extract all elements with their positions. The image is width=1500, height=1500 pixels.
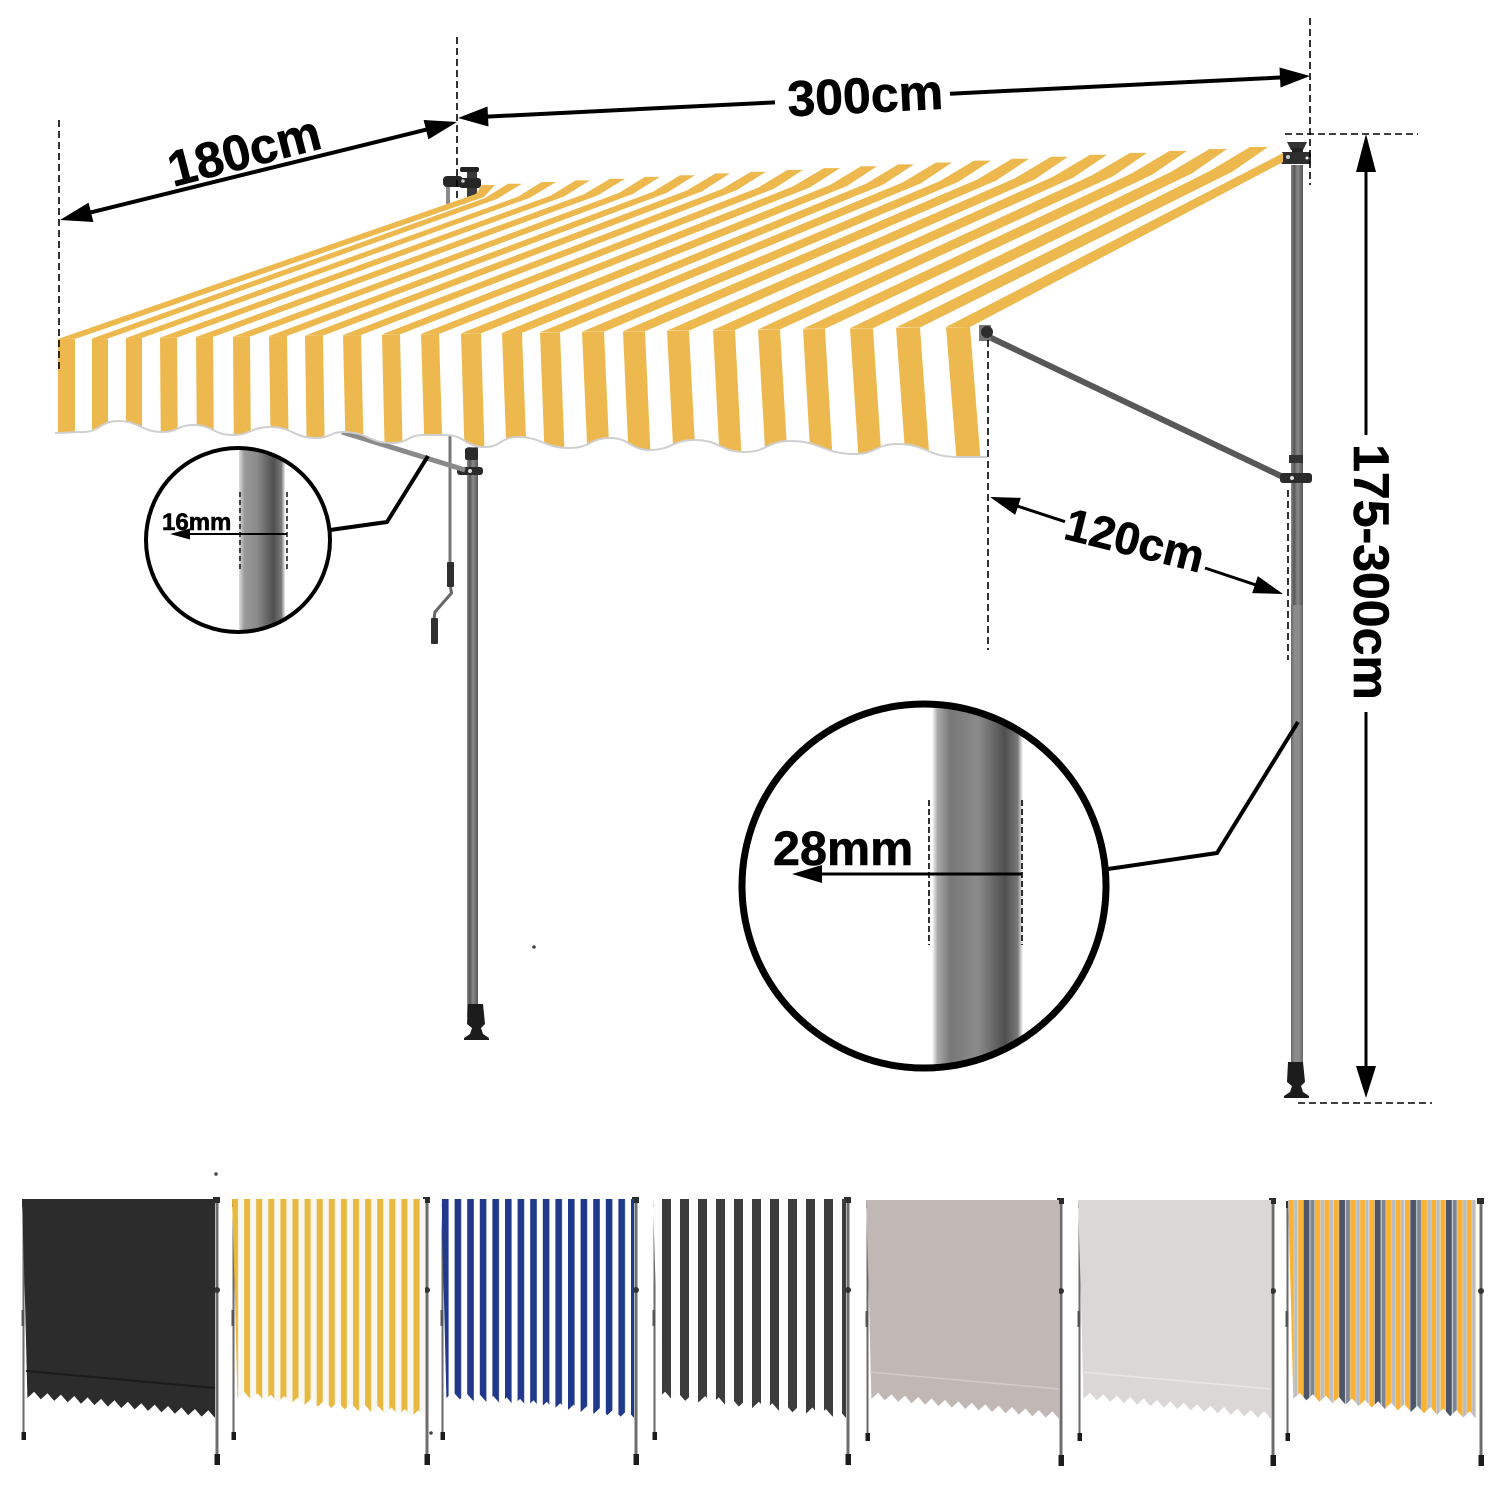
swatch: taupe bbox=[866, 1198, 1064, 1466]
stray dots bbox=[214, 945, 536, 1435]
dimension: 300cm width bbox=[458, 64, 1310, 127]
swatch: multicolour stripes bbox=[1286, 1198, 1484, 1466]
dimension: 180cm depth bbox=[60, 104, 457, 222]
callout: 28mm pole diameter: 28mm bbox=[773, 822, 913, 876]
swatch: yellow and white stripes bbox=[232, 1197, 430, 1465]
dimension: 300cm width: 300cm bbox=[786, 64, 944, 127]
dimension: 180cm depth: 180cm bbox=[162, 104, 327, 198]
dimension: 120cm extension: 120cm bbox=[1060, 499, 1210, 582]
left pole top bracket bbox=[443, 167, 481, 205]
awning canopy top surface bbox=[58, 147, 1283, 339]
dimension: 175-300cm height: 175-300cm bbox=[1343, 444, 1399, 700]
callout: 28mm pole diameter bbox=[742, 700, 1298, 1072]
swatch: blue and white stripes bbox=[440, 1197, 639, 1465]
swatch: anthracite and white stripes bbox=[652, 1197, 851, 1465]
right support pole bbox=[1284, 165, 1309, 1098]
swatch: black bbox=[22, 1197, 220, 1465]
left support arm bbox=[342, 432, 465, 470]
right support arm bbox=[979, 325, 1312, 483]
crank handle bbox=[431, 436, 454, 644]
callout: 16mm arm diameter: 16mm bbox=[162, 509, 231, 536]
right pole top bracket bbox=[1281, 142, 1311, 164]
swatch: light grey bbox=[1078, 1198, 1276, 1466]
dimension: 175-300cm height bbox=[1343, 134, 1399, 1098]
left support pole bbox=[457, 447, 489, 1040]
callout: 16mm arm diameter bbox=[146, 445, 428, 635]
awning valance with scalloped edge bbox=[55, 327, 987, 458]
dimension: 120cm extension bbox=[990, 497, 1283, 594]
dashed guide lines bbox=[59, 18, 1432, 1103]
